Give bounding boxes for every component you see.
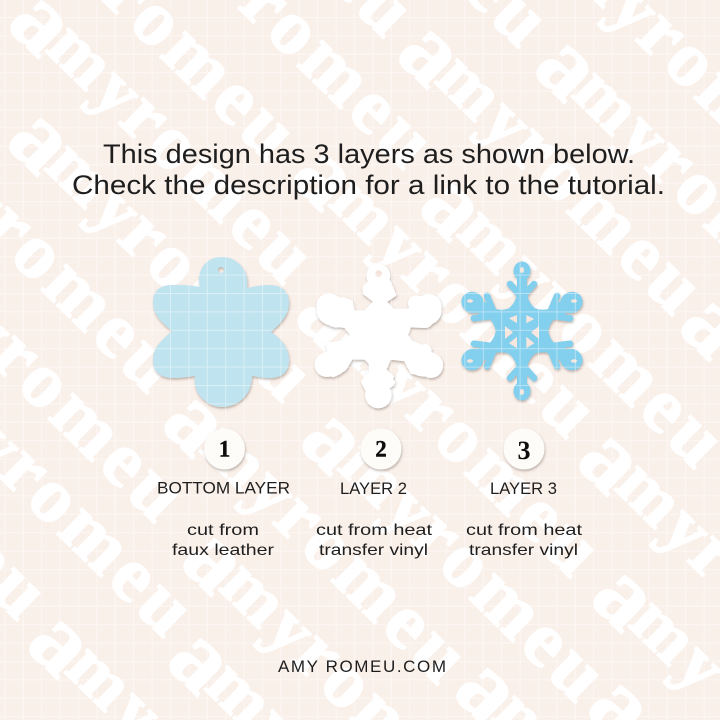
watermark: diagonal amy romeu pattern: my xyxy=(187,405,317,535)
label: bottom layer xyxy=(157,478,290,559)
title: Check the description for a link to the tutorial. xyxy=(72,170,665,200)
step 1 badge xyxy=(204,428,245,470)
step 2 badge xyxy=(360,428,402,470)
icon: layer 3 blue snowflake xyxy=(452,262,592,400)
label: layer 3: cut from heat xyxy=(466,522,583,539)
watermark: diagonal amy romeu pattern: a xyxy=(559,403,671,515)
watermark: diagonal amy romeu pattern: romeu xyxy=(392,365,624,595)
watermark: diagonal amy romeu pattern: romeu xyxy=(494,103,720,333)
watermark: diagonal amy romeu pattern: my xyxy=(444,189,574,319)
watermark: diagonal amy romeu pattern: my xyxy=(32,123,162,253)
title: This design has 3 layers as shown below. xyxy=(103,139,635,169)
watermark: diagonal amy romeu pattern: a xyxy=(9,586,121,698)
watermark: diagonal amy romeu pattern: my xyxy=(422,36,552,166)
label: layer 2: cut from heat xyxy=(316,522,433,539)
watermark: diagonal amy romeu pattern: my xyxy=(325,423,455,553)
icon: layer 2 white snowflake xyxy=(315,264,443,408)
watermark: diagonal amy romeu pattern: romeu xyxy=(388,226,620,456)
watermark: diagonal amy romeu pattern: a xyxy=(163,503,275,615)
watermark: diagonal amy romeu pattern: romeu xyxy=(259,472,491,702)
label: bottom layer: cut from xyxy=(187,522,259,539)
watermark: diagonal amy romeu pattern: my xyxy=(316,159,446,289)
title xyxy=(72,139,665,200)
watermark: diagonal amy romeu pattern: a xyxy=(282,383,394,495)
watermark: diagonal amy romeu pattern: a xyxy=(273,119,385,231)
icon: bottom layer scalloped tag xyxy=(153,257,289,407)
watermark: diagonal amy romeu pattern: my xyxy=(559,50,689,180)
watermark: diagonal amy romeu pattern: romeu xyxy=(105,72,337,302)
label: bottom layer: BOTTOM LAYER xyxy=(157,478,290,498)
watermark: diagonal amy romeu pattern: a xyxy=(516,10,628,122)
watermark: diagonal amy romeu pattern: a xyxy=(144,365,256,477)
watermark: diagonal amy romeu pattern: a xyxy=(401,149,513,261)
label: layer 3 xyxy=(466,479,583,559)
step 1 badge: 1 xyxy=(219,436,230,462)
watermark: diagonal amy romeu pattern: a xyxy=(149,603,261,715)
watermark: diagonal amy romeu pattern: a xyxy=(277,258,389,370)
watermark: diagonal amy romeu pattern: my xyxy=(33,5,163,135)
label: layer 2: transfer vinyl xyxy=(319,542,428,559)
label: layer 2: LAYER 2 xyxy=(340,479,407,498)
watermark: diagonal amy romeu pattern: romeu xyxy=(397,490,629,720)
watermark: diagonal amy romeu pattern: romeu xyxy=(104,190,336,420)
footer website: AMY ROMEU.COM xyxy=(278,657,446,676)
step 3 badge xyxy=(504,428,544,470)
label: layer 3: LAYER 3 xyxy=(490,479,557,498)
step 3 badge: 3 xyxy=(518,436,530,465)
label: bottom layer: faux leather xyxy=(172,542,275,559)
label: layer 3: transfer vinyl xyxy=(469,542,578,559)
step 2 badge: 2 xyxy=(375,436,387,462)
label: layer 2 xyxy=(316,479,433,559)
watermark: diagonal amy romeu pattern: my xyxy=(320,298,450,428)
watermark: diagonal amy romeu pattern: a xyxy=(573,540,685,652)
watermark: diagonal amy romeu pattern: my xyxy=(206,543,336,673)
